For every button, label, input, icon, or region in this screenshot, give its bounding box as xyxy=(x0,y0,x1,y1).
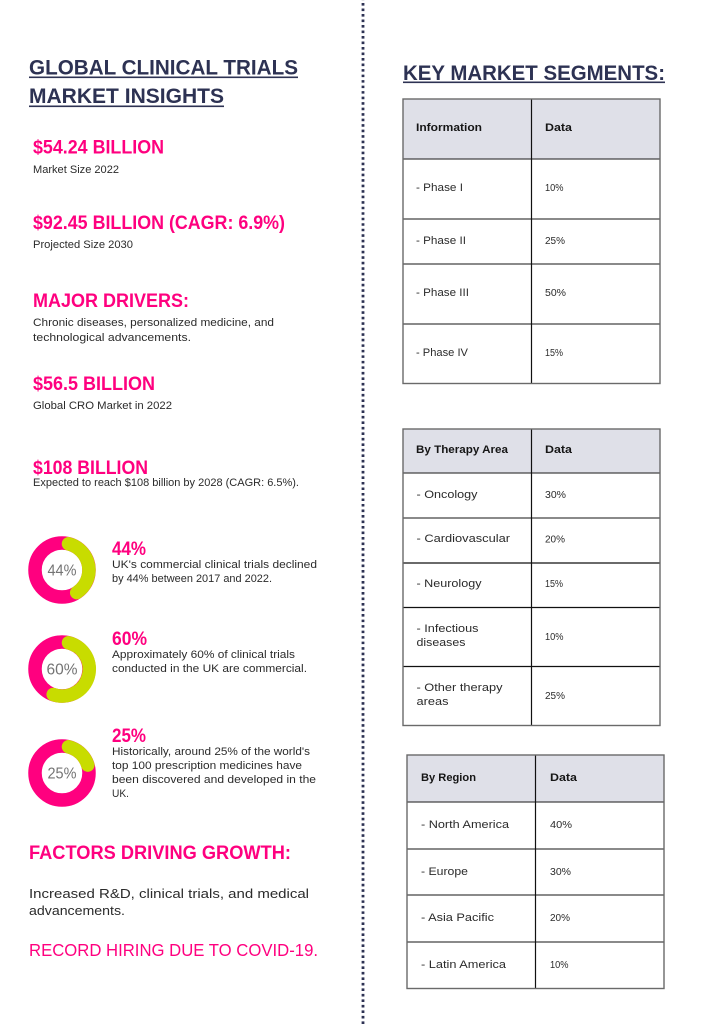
callout: record hiring: RECORD HIRING DUE TO COVID-19. xyxy=(29,940,318,960)
stat text: 44% xyxy=(112,539,317,585)
title: MARKET INSIGHTS xyxy=(29,84,224,108)
stat text: 25%: UK. xyxy=(112,788,129,800)
stat text: 25%: 25% xyxy=(112,726,146,747)
donut: 44% xyxy=(35,543,89,597)
factors driving growth: Increased R&D, clinical trials, and medical xyxy=(29,887,309,901)
table: by region: - North America xyxy=(421,819,509,831)
table: by region: 10% xyxy=(550,960,569,971)
table: by therapy area: 15% xyxy=(545,579,563,590)
table: by therapy area: diseases xyxy=(416,637,466,649)
stat: global CRO market xyxy=(33,374,172,412)
table: information: 10% xyxy=(545,183,564,194)
table: by therapy area: - Neurology xyxy=(416,578,482,590)
donut: 44%: 44% xyxy=(48,562,77,580)
major drivers: technological advancements. xyxy=(33,332,191,344)
table: information: 15% xyxy=(545,348,563,359)
table: by therapy area: Data xyxy=(545,444,573,456)
table: information: 25% xyxy=(545,236,565,247)
table: by therapy area: 20% xyxy=(545,534,565,546)
stat: projected size 2030 xyxy=(33,213,285,251)
table: by therapy area: - Infectious xyxy=(416,623,479,635)
stat: CRO market 2028 xyxy=(33,458,299,489)
table: by region: 20% xyxy=(550,913,570,924)
table: information: 50% xyxy=(545,288,566,299)
table: by therapy area: - Other therapy xyxy=(416,682,503,694)
table: by therapy area: areas xyxy=(416,696,449,708)
table: by region xyxy=(407,755,664,988)
table: by therapy area xyxy=(403,429,660,726)
table: by region: 40% xyxy=(550,820,572,831)
donut: 60%: 60% xyxy=(46,662,78,678)
table: information: Data xyxy=(545,122,573,134)
stat: CRO market 2028: Expected to reach $108 billion by 2028 (CAGR: 6.5%). xyxy=(33,477,299,489)
stat text: 44%: UK's commercial clinical trials declined xyxy=(112,559,317,571)
table: information: - Phase III xyxy=(416,287,469,299)
table: by region: - Latin America xyxy=(421,959,506,971)
stat text: 25%: been discovered and developed in the xyxy=(112,774,316,786)
title: GLOBAL CLINICAL TRIALS xyxy=(29,56,298,80)
stat text: 25% xyxy=(112,726,316,800)
stat: global CRO market: Global CRO Market in 2022 xyxy=(33,400,172,412)
major drivers: Chronic diseases, personalized medicine, and xyxy=(33,317,274,329)
stat text: 60% xyxy=(112,629,307,675)
table: by region: Data xyxy=(550,772,578,784)
table: by region: - Asia Pacific xyxy=(421,912,495,924)
donut: 25%: 25% xyxy=(48,766,77,782)
table: information: Information xyxy=(416,122,482,134)
table: by therapy area: - Oncology xyxy=(416,489,478,501)
donut: 25% xyxy=(35,746,89,800)
stat: projected size 2030: $92.45 BILLION (CAGR: 6.9%) xyxy=(33,213,285,234)
title xyxy=(29,56,298,108)
stat text: 44%: 44% xyxy=(112,539,146,560)
stat: market size 2022 xyxy=(33,138,164,176)
table: by region: By Region xyxy=(421,772,476,784)
major drivers xyxy=(33,291,274,344)
table: by therapy area: - Cardiovascular xyxy=(416,533,510,545)
table: by region: 30% xyxy=(550,867,571,878)
table: information: - Phase I xyxy=(416,182,463,194)
table: by therapy area: 10% xyxy=(545,632,564,643)
table: by region: - Europe xyxy=(421,866,468,878)
heading: key market segments: KEY MARKET SEGMENTS: xyxy=(403,61,665,85)
table: information: - Phase II xyxy=(416,235,466,247)
stat text: 25%: top 100 prescription medicines have xyxy=(112,760,302,772)
major drivers: MAJOR DRIVERS: xyxy=(33,291,189,312)
stat text: 25%: Historically, around 25% of the world's xyxy=(112,746,310,758)
stat: market size 2022: Market Size 2022 xyxy=(33,164,119,176)
table: information: - Phase IV xyxy=(416,347,469,359)
donut: 60% xyxy=(35,642,89,696)
table: by therapy area: 25% xyxy=(545,691,565,702)
stat: projected size 2030: Projected Size 2030 xyxy=(33,239,133,251)
table: by therapy area: By Therapy Area xyxy=(416,444,509,456)
stat: global CRO market: $56.5 BILLION xyxy=(33,374,155,395)
table: by therapy area: 30% xyxy=(545,490,566,501)
factors driving growth: advancements. xyxy=(29,904,125,918)
stat text: 60%: Approximately 60% of clinical trials xyxy=(112,649,295,661)
stat text: 60%: 60% xyxy=(112,629,147,650)
stat: CRO market 2028: $108 BILLION xyxy=(33,458,148,479)
stat: market size 2022: $54.24 BILLION xyxy=(33,138,164,158)
stat text: 60%: conducted in the UK are commercial. xyxy=(112,663,307,675)
stat text: 44%: by 44% between 2017 and 2022. xyxy=(112,573,272,585)
factors driving growth xyxy=(29,843,309,918)
factors driving growth: FACTORS DRIVING GROWTH: xyxy=(29,843,291,864)
table: information xyxy=(403,99,660,384)
